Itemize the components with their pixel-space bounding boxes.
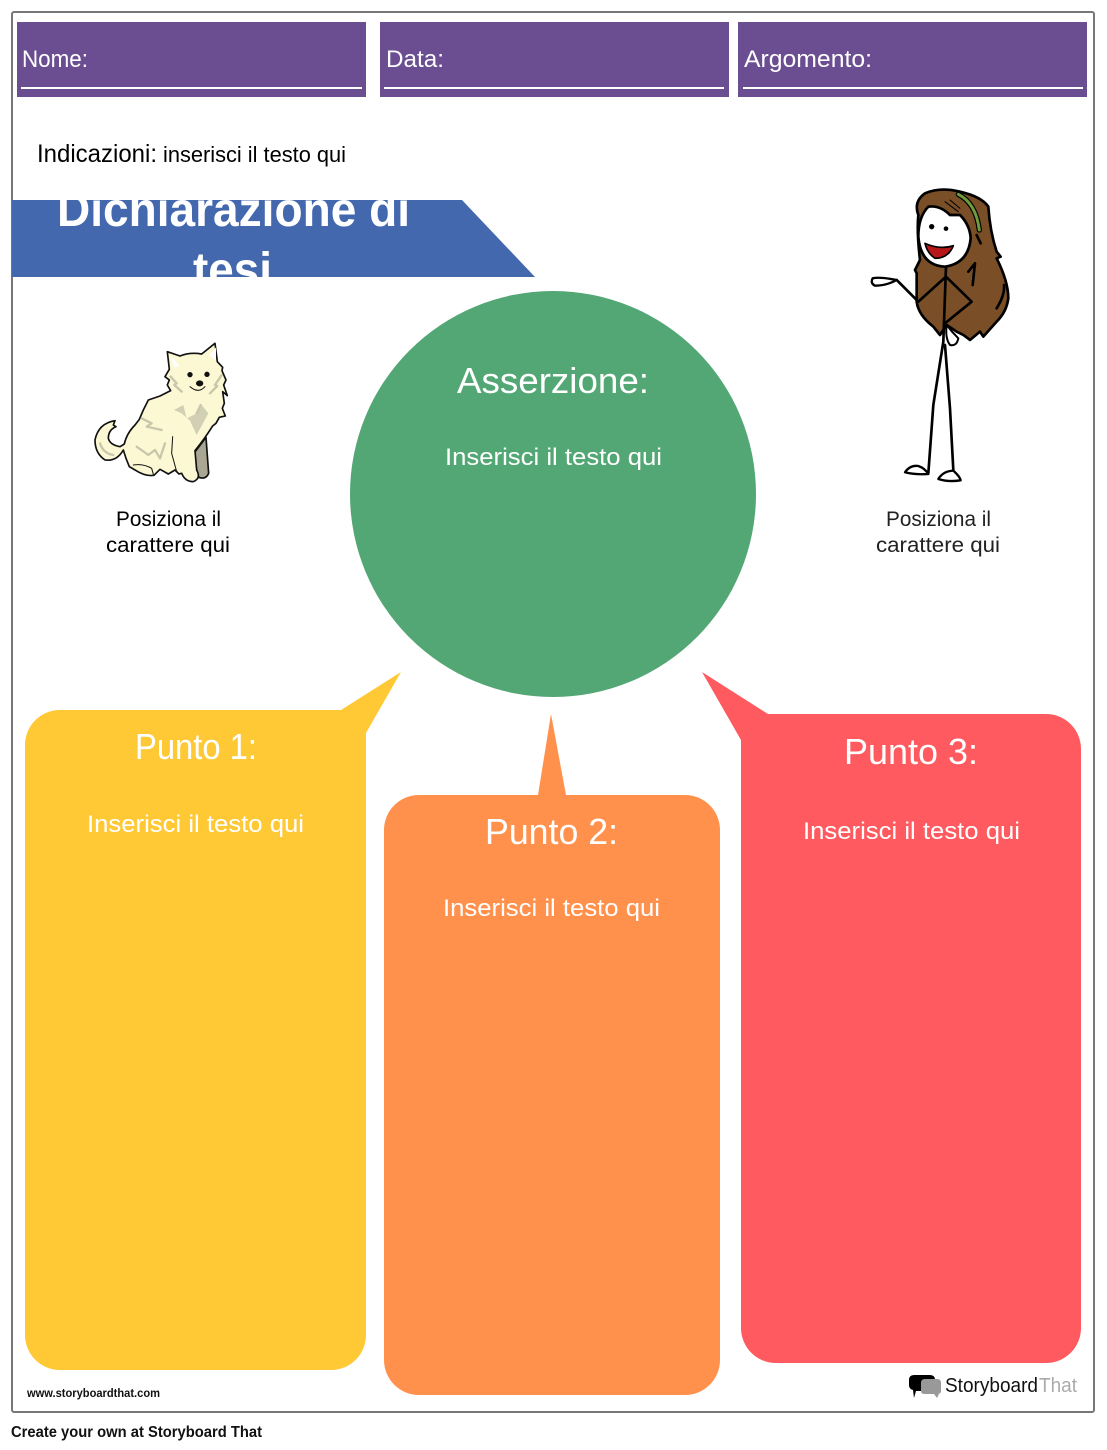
panel: claim circle: Asserzione: <box>457 360 649 401</box>
header field: date: Data: <box>386 46 444 73</box>
header field: name: Nome: <box>22 46 88 73</box>
panel: point 2 <box>384 714 720 1395</box>
panel: point 2: Punto 2: <box>485 811 618 852</box>
panel: point 1: Punto 1: <box>135 726 257 767</box>
website text: www.storyboardthat.com <box>26 1388 160 1400</box>
icon: girl character <box>872 190 1008 481</box>
directions text <box>37 140 346 168</box>
footer credit: Create your own at Storyboard That <box>11 1424 262 1441</box>
panel: point 2: Inserisci il testo qui <box>443 895 660 922</box>
icon: dog character <box>95 343 227 482</box>
header field: name <box>17 22 366 97</box>
header field: topic <box>738 22 1087 97</box>
directions text: inserisci il testo qui <box>163 142 346 167</box>
panel: claim circle <box>350 291 756 697</box>
caption: left character: carattere qui <box>106 534 230 557</box>
panel: point 1 <box>25 672 401 1370</box>
panel: point 1: Inserisci il testo qui <box>87 811 304 838</box>
logo: Storyboard That: Storyboard <box>945 1375 1038 1397</box>
caption: right character <box>876 508 1000 557</box>
caption: left character: Posiziona il <box>116 508 221 531</box>
caption: left character <box>106 508 230 557</box>
header field: topic: Argomento: <box>744 46 872 73</box>
logo: Storyboard That: That <box>1039 1375 1077 1397</box>
caption: right character: Posiziona il <box>886 508 991 531</box>
header field: date <box>380 22 729 97</box>
panel: point 3 <box>702 672 1081 1363</box>
panel: point 3: Punto 3: <box>844 731 978 772</box>
title banner: tesi <box>193 244 272 297</box>
title banner: Dichiarazione di <box>57 184 410 237</box>
panel: point 3: Inserisci il testo qui <box>803 818 1020 845</box>
panel: claim circle: Inserisci il testo qui <box>445 444 662 471</box>
title banner <box>12 200 535 277</box>
directions text: Indicazioni: <box>37 140 157 168</box>
caption: right character: carattere qui <box>876 534 1000 557</box>
logo: Storyboard That <box>909 1375 1077 1398</box>
